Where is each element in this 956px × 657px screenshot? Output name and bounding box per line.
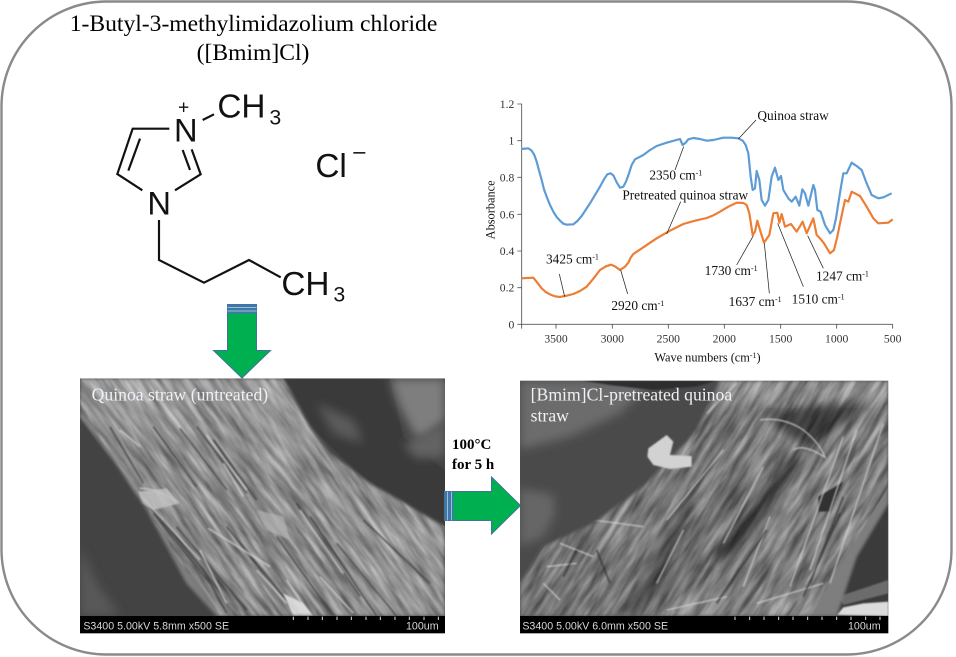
image caption: straw bbox=[531, 406, 569, 426]
annotation labels: -1 bbox=[592, 252, 599, 261]
y axis tick labels: 0.4 bbox=[500, 245, 514, 258]
annotation labels bbox=[546, 108, 869, 313]
annotation labels: 2350 cm bbox=[649, 167, 696, 182]
annotation labels: -1 bbox=[862, 270, 869, 279]
annotation labels: -1 bbox=[696, 168, 702, 177]
x axis tick labels: 1000 bbox=[825, 333, 848, 346]
scale bar strip: S3400 5.00kV 6.0mm x500 SE bbox=[522, 620, 668, 632]
SEM image: [Bmim]Cl-pretreated quinoa straw bbox=[520, 380, 888, 634]
y axis tick labels: 0.6 bbox=[500, 208, 514, 221]
atom labels: CH bbox=[281, 266, 329, 303]
y axis tick labels: 0.8 bbox=[500, 171, 514, 184]
title bbox=[70, 11, 437, 66]
chloride ion bbox=[315, 148, 365, 185]
title: ([Bmim]Cl) bbox=[197, 40, 309, 66]
annotation labels: 1637 cm bbox=[729, 294, 775, 309]
annotation labels: Pretreated quinoa straw bbox=[622, 187, 749, 202]
arrow: down to untreated straw bbox=[214, 304, 270, 378]
y axis tick labels: 1.2 bbox=[500, 98, 514, 111]
annotation labels: -1 bbox=[838, 292, 845, 301]
y axis tick labels: 0.2 bbox=[500, 282, 514, 295]
scale bar strip bbox=[520, 616, 888, 633]
annotation labels: 3425 cm bbox=[546, 251, 592, 266]
x axis tick labels: 3000 bbox=[601, 333, 624, 346]
process condition label: for 5 h bbox=[452, 457, 495, 473]
arrow: pretreatment step bbox=[444, 477, 520, 534]
image caption: [Bmim]Cl-pretreated quinoa bbox=[531, 385, 732, 405]
x axis tick labels: 1500 bbox=[769, 333, 792, 346]
series: pretreated quinoa straw bbox=[522, 192, 893, 297]
atom labels: 3 bbox=[269, 105, 281, 129]
x axis tick labels: 2000 bbox=[713, 333, 736, 346]
y axis tick labels: 1 bbox=[509, 135, 515, 148]
annotation labels: -1 bbox=[751, 264, 758, 273]
x axis tick labels bbox=[544, 333, 902, 346]
x axis title: -1 bbox=[750, 351, 757, 360]
process condition label bbox=[452, 437, 495, 473]
atom labels: N bbox=[147, 185, 171, 222]
process condition label: 100°C bbox=[452, 437, 491, 453]
annotation labels: Quinoa straw bbox=[757, 108, 829, 123]
axes bbox=[517, 104, 893, 329]
ring and butyl bonds bbox=[117, 114, 281, 283]
x axis tick labels: 2500 bbox=[657, 333, 680, 346]
chloride ion: Cl bbox=[315, 148, 347, 185]
chemical structure: [Bmim]Cl bbox=[117, 89, 365, 307]
y axis title: Absorbance bbox=[483, 180, 497, 239]
scale bar strip: 100um bbox=[406, 620, 439, 632]
series: quinoa straw bbox=[522, 138, 892, 233]
atom labels: + bbox=[178, 97, 189, 118]
scale bar strip: S3400 5.00kV 5.8mm x500 SE bbox=[83, 620, 229, 632]
bright fragment bbox=[647, 435, 692, 469]
image caption: Quinoa straw (untreated) bbox=[92, 385, 268, 405]
annotation labels: 2920 cm bbox=[611, 298, 658, 313]
x axis title: ) bbox=[757, 351, 761, 365]
scale bar strip bbox=[80, 616, 445, 633]
atom labels: 3 bbox=[333, 283, 345, 307]
annotation labels: -1 bbox=[658, 299, 664, 308]
scale bar strip: 100um bbox=[848, 620, 881, 632]
title: 1-Butyl-3-methylimidazolium chloride bbox=[70, 11, 437, 37]
annotation labels: -1 bbox=[775, 295, 782, 304]
FTIR chart bbox=[483, 98, 902, 365]
annotation labels: 1730 cm bbox=[705, 263, 751, 278]
atom labels bbox=[147, 89, 345, 307]
annotation leader lines bbox=[559, 120, 823, 297]
image caption bbox=[531, 385, 732, 426]
x axis tick labels: 500 bbox=[884, 333, 902, 346]
x axis tick labels: 3500 bbox=[544, 333, 568, 346]
y axis tick labels: 0 bbox=[509, 318, 515, 331]
SEM image: untreated quinoa straw bbox=[80, 378, 445, 634]
atom labels: N bbox=[174, 111, 198, 148]
micrograph bbox=[520, 380, 888, 616]
atom labels: CH bbox=[217, 89, 265, 126]
micrograph bbox=[80, 378, 445, 616]
y axis tick labels bbox=[500, 98, 515, 331]
annotation labels: 1247 cm bbox=[816, 269, 862, 284]
annotation labels: 1510 cm bbox=[792, 291, 838, 306]
x axis title: Wave numbers (cm bbox=[654, 351, 750, 365]
